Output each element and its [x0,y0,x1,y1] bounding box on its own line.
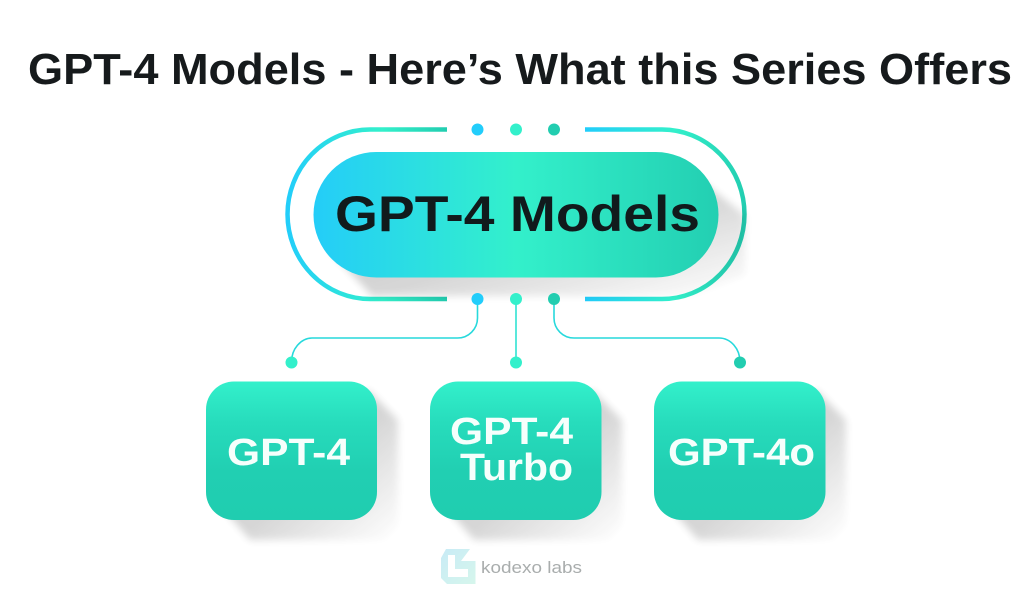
outer ring: right bracket [585,130,744,299]
top dots [472,124,560,136]
card: GPT-4 Turbo [430,382,622,540]
panel: central GPT-4 Models node [288,124,745,299]
pill [314,152,718,278]
connector to GPT-4o [548,293,746,368]
logo: kodexo labs [441,549,582,584]
icon: logo mark [441,549,476,584]
card: GPT-4 [206,382,398,540]
connectors [286,293,746,368]
card: GPT-4: GPT-4 [227,432,350,474]
card: GPT-4 Turbo: Turbo [460,447,573,489]
connector to GPT-4 Turbo [510,293,522,368]
title: GPT-4 Models - Here’s What this Series Offers [28,45,1012,94]
card: GPT-4o: GPT-4o [668,432,815,474]
pill shadow [330,180,745,296]
logo wordmark: kodexo labs [481,558,582,577]
card: GPT-4 Turbo: GPT-4 [450,411,573,453]
outer ring: left bracket [288,130,447,299]
pill label: GPT-4 Models [335,186,700,242]
connector to GPT-4 [286,293,484,368]
card: GPT-4o [654,382,846,540]
